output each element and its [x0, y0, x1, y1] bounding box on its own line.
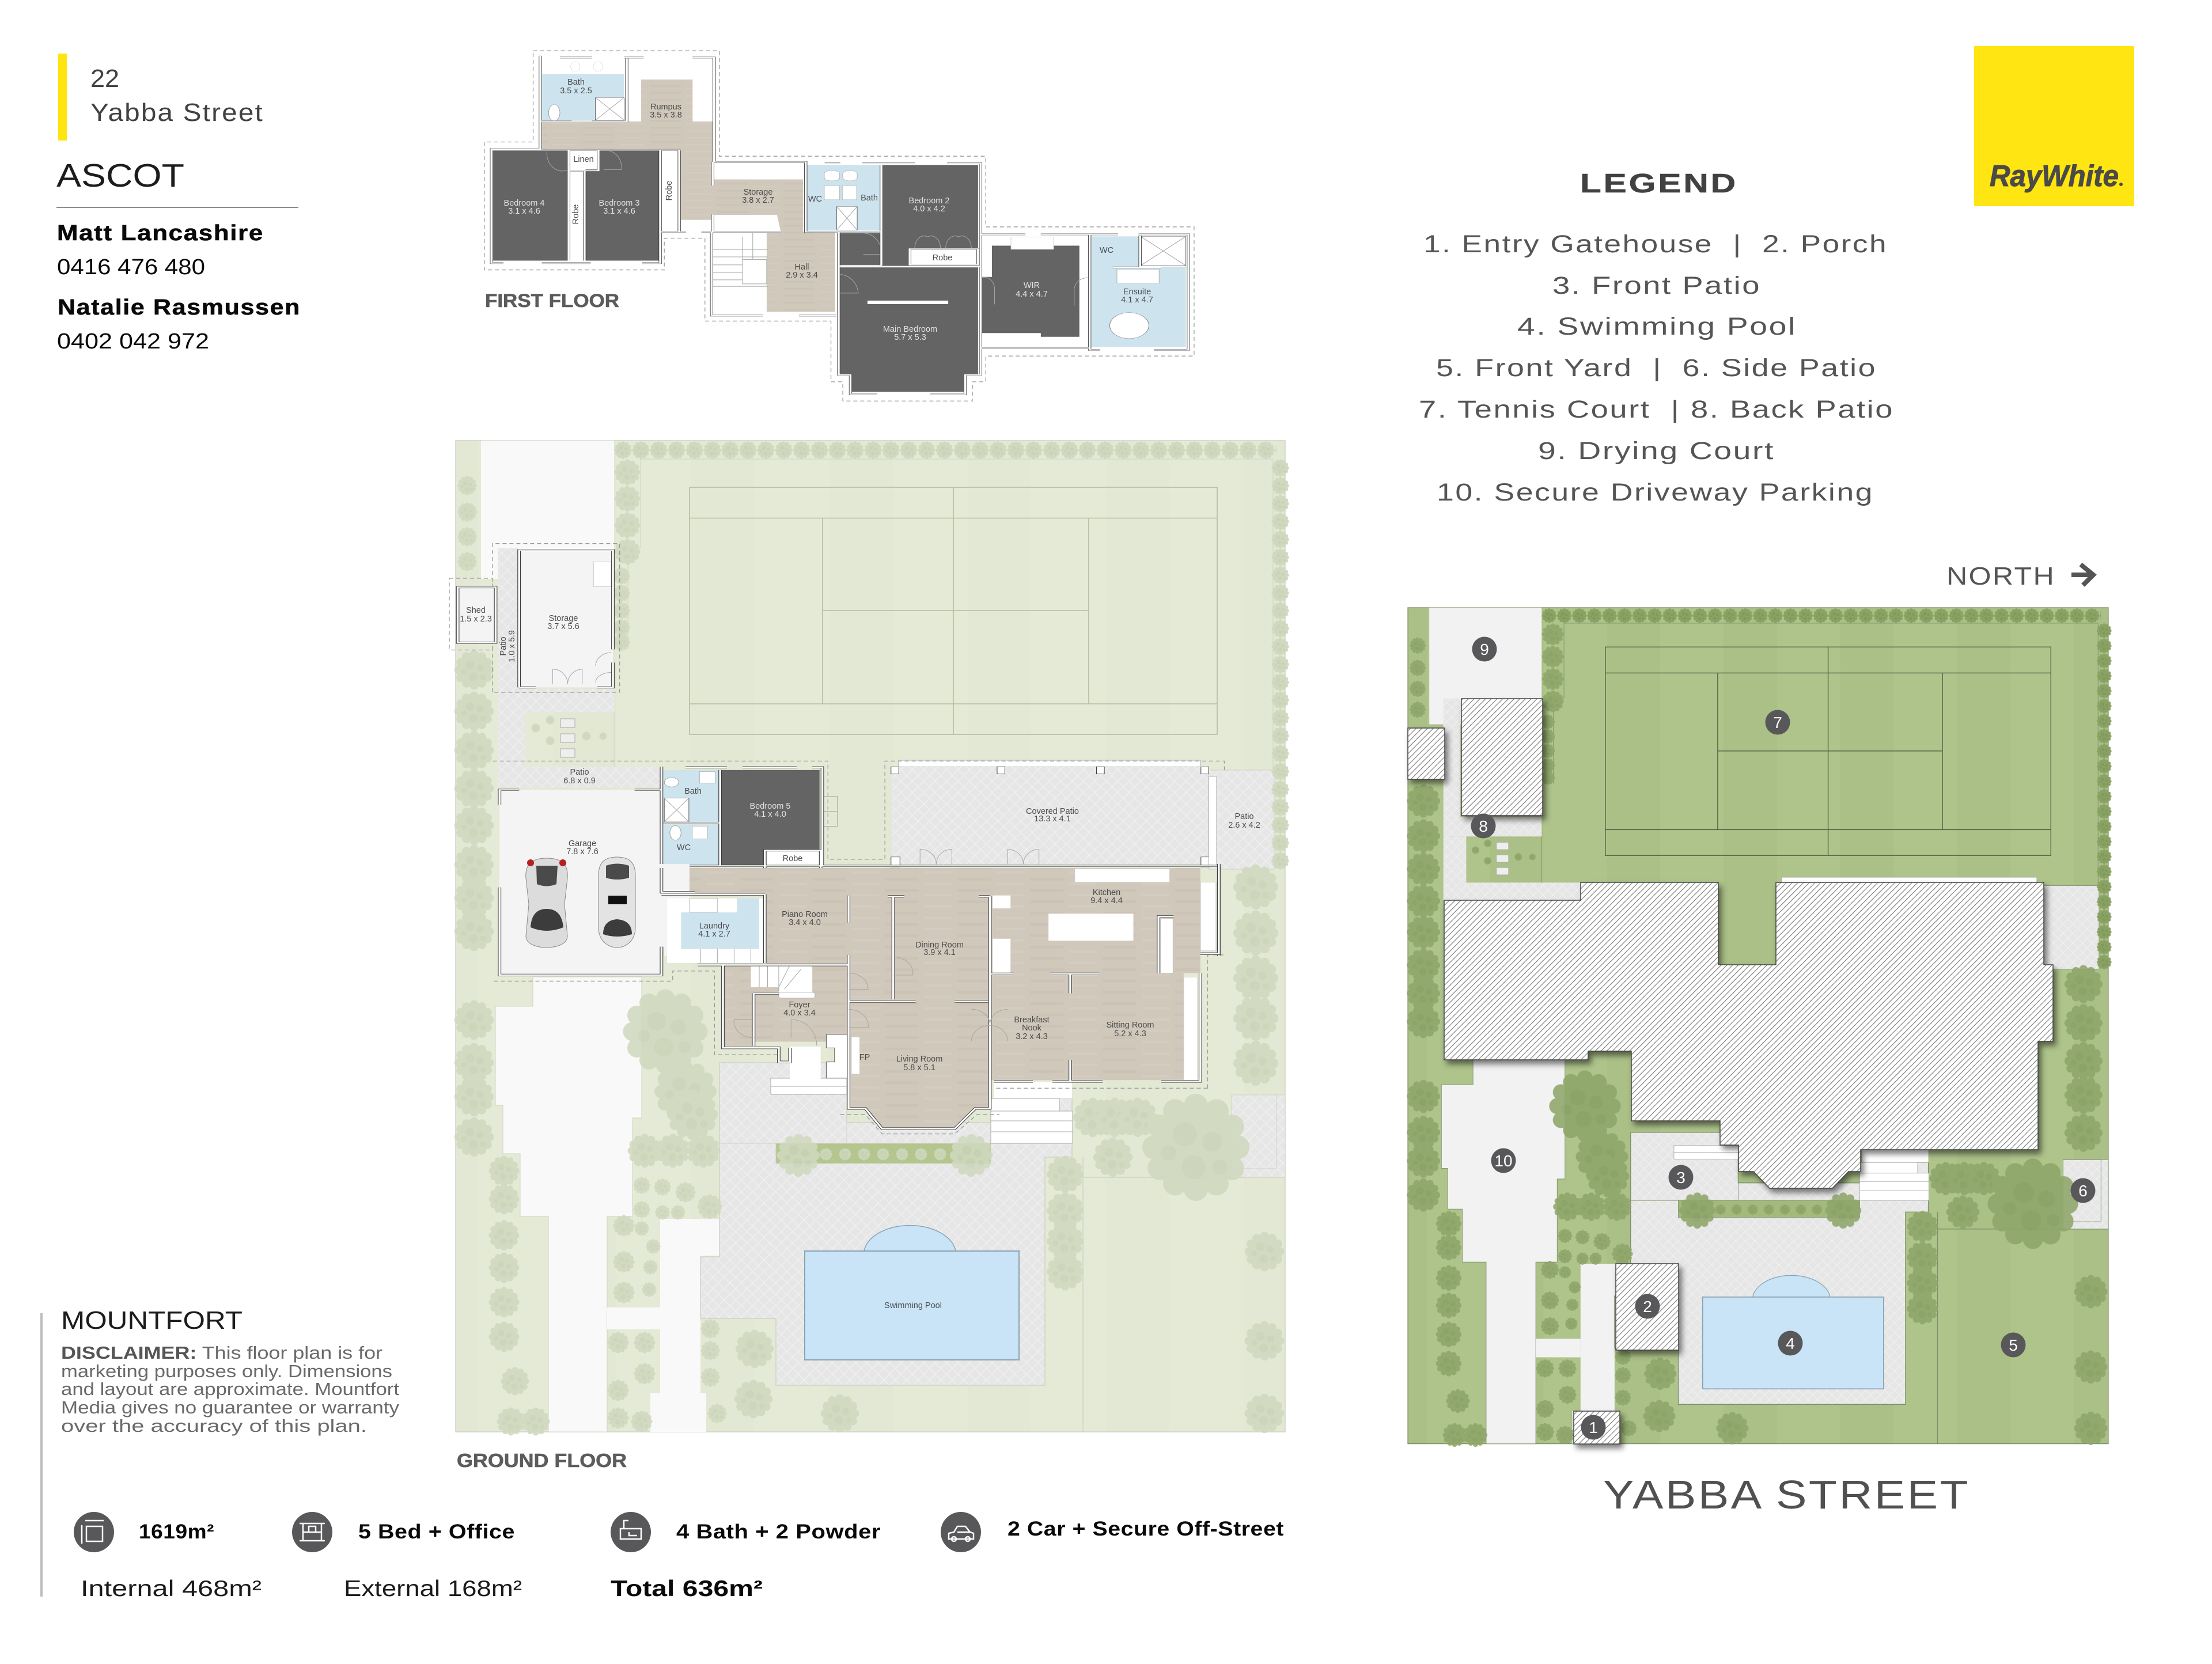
ground floor room labels: 3.2 x 4.3 — [1016, 1032, 1048, 1041]
roofs — [1408, 699, 2053, 1444]
address heading: Yabba Street — [90, 98, 264, 127]
legend list: 3. Front Patio — [1552, 272, 1761, 300]
ground floor room labels: 3.7 x 5.6 — [547, 622, 579, 631]
ground floor room labels — [460, 606, 1260, 1310]
first floor room labels: 2.9 x 3.4 — [786, 271, 818, 280]
numbered markers: 7 — [1773, 714, 1782, 731]
ground floor room labels: 3.4 x 4.0 — [789, 918, 821, 927]
logo: Ray White — [1974, 46, 2134, 206]
icon: north arrow — [2071, 564, 2093, 585]
ground floor room labels: Covered Patio — [1026, 807, 1079, 816]
ground floor room labels: Dining Room — [915, 941, 964, 950]
first floor room labels: Bath — [861, 194, 878, 203]
icon: bed — [292, 1512, 332, 1552]
stat: land size: 1619m² — [139, 1521, 214, 1543]
stat: bedrooms: 5 Bed + Office — [358, 1521, 515, 1543]
ground floor room labels: 5.8 x 5.1 — [903, 1063, 935, 1072]
ground floor room labels: 1.0 x 5.9 — [507, 630, 517, 662]
numbered markers: 10 — [1494, 1152, 1513, 1170]
ground floor room labels: Garage — [569, 839, 596, 848]
ground floor room labels: 4.1 x 2.7 — [698, 930, 730, 939]
numbered markers: 6 — [2078, 1182, 2088, 1200]
ground floor room labels: FP — [859, 1053, 870, 1062]
first floor room labels: 4.4 x 4.7 — [1016, 290, 1048, 299]
ground floor room labels: Living Room — [896, 1055, 942, 1064]
first floor room labels: Bedroom 3 — [599, 199, 639, 208]
first floor room labels: 3.1 x 4.6 — [508, 207, 540, 216]
ground floor room labels: Sitting Room — [1106, 1021, 1154, 1030]
ground floor room labels: 1.5 x 2.3 — [460, 615, 492, 624]
agent contacts: Natalie Rasmussen — [58, 295, 301, 320]
ground floor room labels: Swimming Pool — [884, 1301, 942, 1310]
disclaimer: DISCLAIMER: This floor plan is for — [61, 1343, 382, 1363]
numbered markers: 9 — [1480, 640, 1489, 658]
first floor room labels — [504, 78, 1153, 342]
divider — [56, 207, 298, 208]
first floor room labels: Rumpus — [650, 103, 681, 112]
site plan — [1407, 608, 2112, 1447]
suburb title: ASCOT — [56, 157, 184, 194]
ground floor room labels: Kitchen — [1093, 888, 1120, 897]
ground floor room labels: Shed — [466, 606, 486, 615]
first floor room labels: Ensuite — [1123, 287, 1151, 297]
ground floor room labels: Breakfast — [1014, 1015, 1050, 1025]
icon: land size — [74, 1512, 114, 1552]
ground floor room labels: 13.3 x 4.1 — [1034, 814, 1071, 824]
first floor room labels: Robe — [933, 253, 952, 263]
ground floor room labels: Storage — [549, 614, 578, 623]
first floor room labels: WIR — [1024, 281, 1040, 290]
address heading: 22 — [90, 65, 119, 93]
Mountfort heading: MOUNTFORT — [61, 1306, 243, 1335]
disclaimer — [61, 1343, 400, 1436]
first floor room labels: WC — [808, 195, 822, 204]
north label: NORTH — [1946, 562, 2055, 590]
icon: bath — [611, 1512, 651, 1552]
legend list: 7. Tennis Court | 8. Back Patio — [1419, 396, 1894, 423]
first floor plan — [484, 51, 1194, 401]
ground floor heading: GROUND FLOOR — [457, 1450, 627, 1471]
ground floor room labels: Bath — [684, 787, 702, 796]
disclaimer: over the accuracy of this plan. — [61, 1416, 367, 1436]
first floor room labels: WC — [1100, 246, 1113, 255]
legend list: 4. Swimming Pool — [1517, 313, 1797, 340]
numbered markers: 8 — [1479, 817, 1488, 835]
ground floor room labels: 4.0 x 3.4 — [783, 1009, 816, 1018]
ground floor room labels: 4.1 x 4.0 — [754, 810, 786, 819]
address heading — [90, 65, 264, 127]
ground floor room labels: WC — [677, 843, 691, 852]
numbered markers: 5 — [2009, 1336, 2018, 1354]
car: right — [599, 857, 635, 947]
stat: bathrooms: 4 Bath + 2 Powder — [676, 1521, 881, 1543]
ground floor building — [449, 544, 1225, 1134]
legend list: 10. Secure Driveway Parking — [1437, 479, 1874, 506]
legend list: 1. Entry Gatehouse | 2. Porch — [1423, 230, 1888, 258]
first floor room labels: Robe — [665, 181, 674, 200]
first floor room labels: 3.1 x 4.6 — [603, 207, 635, 216]
street name: YABBA STREET — [1603, 1472, 1970, 1517]
numbered markers: 2 — [1643, 1298, 1652, 1316]
ground floor room labels: 3.9 x 4.1 — [923, 948, 956, 957]
stat: parking: 2 Car + Secure Off-Street — [1007, 1518, 1284, 1540]
address accent bar — [58, 54, 67, 141]
ground floor room labels: Piano Room — [782, 910, 828, 919]
legend list — [1419, 230, 1894, 506]
first floor room labels: Bath — [567, 78, 585, 87]
first floor room labels: 4.0 x 4.2 — [913, 204, 945, 214]
ground floor room labels: Bedroom 5 — [750, 802, 790, 811]
icon: car — [941, 1512, 981, 1552]
first floor room labels: 5.7 x 5.3 — [894, 333, 926, 342]
legend list: 5. Front Yard | 6. Side Patio — [1436, 354, 1877, 382]
first floor room labels: Robe — [571, 204, 581, 224]
first floor heading: FIRST FLOOR — [485, 290, 619, 311]
ground floor room labels: 5.2 x 4.3 — [1114, 1029, 1146, 1038]
agent contacts: Matt Lancashire — [57, 221, 264, 245]
left rule — [40, 1313, 43, 1597]
numbered markers: 4 — [1786, 1335, 1795, 1352]
ground floor room labels: 7.8 x 7.6 — [566, 847, 599, 856]
first floor room labels: 3.5 x 2.5 — [560, 86, 592, 96]
first floor room labels: 4.1 x 4.7 — [1121, 295, 1153, 305]
ground floor room labels: 2.6 x 4.2 — [1228, 821, 1260, 830]
ground floor room labels: Foyer — [789, 1000, 810, 1010]
legend heading: LEGEND — [1580, 168, 1738, 198]
ground floor room labels: Robe — [783, 854, 802, 863]
landscape: ground floor garden — [454, 441, 1289, 1435]
agent contacts — [57, 221, 301, 354]
disclaimer: Media gives no guarantee or warranty — [61, 1397, 400, 1417]
numbered markers — [1471, 637, 2096, 1440]
first floor room labels: Bedroom 4 — [504, 199, 544, 208]
first floor room labels: Linen — [573, 155, 594, 164]
logo: Ray White: RayWhite — [1990, 160, 2119, 193]
first floor room labels: Main Bedroom — [883, 325, 937, 334]
shared garden in colour — [1407, 608, 2112, 1447]
first floor room labels: Hall — [795, 263, 809, 272]
ground floor room labels: Nook — [1022, 1024, 1042, 1033]
ground floor room labels: 6.8 x 0.9 — [563, 776, 596, 786]
agent contacts: 0416 476 480 — [57, 255, 205, 279]
ground floor room labels: Patio — [499, 636, 508, 656]
ground floor plan — [449, 441, 1289, 1435]
car: left — [526, 858, 567, 947]
external area: External 168m² — [344, 1576, 522, 1601]
first floor room labels: Storage — [744, 188, 772, 197]
ground floor room labels: Patio — [570, 768, 589, 777]
first floor room labels: 3.5 x 3.8 — [650, 111, 682, 120]
agent contacts: 0402 042 972 — [57, 329, 209, 354]
ground floor room labels: 9.4 x 4.4 — [1090, 896, 1123, 905]
numbered markers: 1 — [1589, 1419, 1598, 1436]
disclaimer: and layout are approximate. Mountfort — [61, 1379, 399, 1399]
first floor room labels: 3.8 x 2.7 — [742, 196, 774, 205]
ground floor room labels: Patio — [1234, 812, 1254, 821]
first floor room labels: Bedroom 2 — [909, 196, 949, 206]
legend list: 9. Drying Court — [1538, 437, 1775, 465]
internal area: Internal 468m² — [81, 1576, 262, 1601]
disclaimer: marketing purposes only. Dimensions — [61, 1361, 392, 1381]
ground floor room labels: Laundry — [699, 922, 730, 931]
numbered markers: 3 — [1676, 1169, 1685, 1187]
total area: Total 636m² — [611, 1576, 763, 1601]
